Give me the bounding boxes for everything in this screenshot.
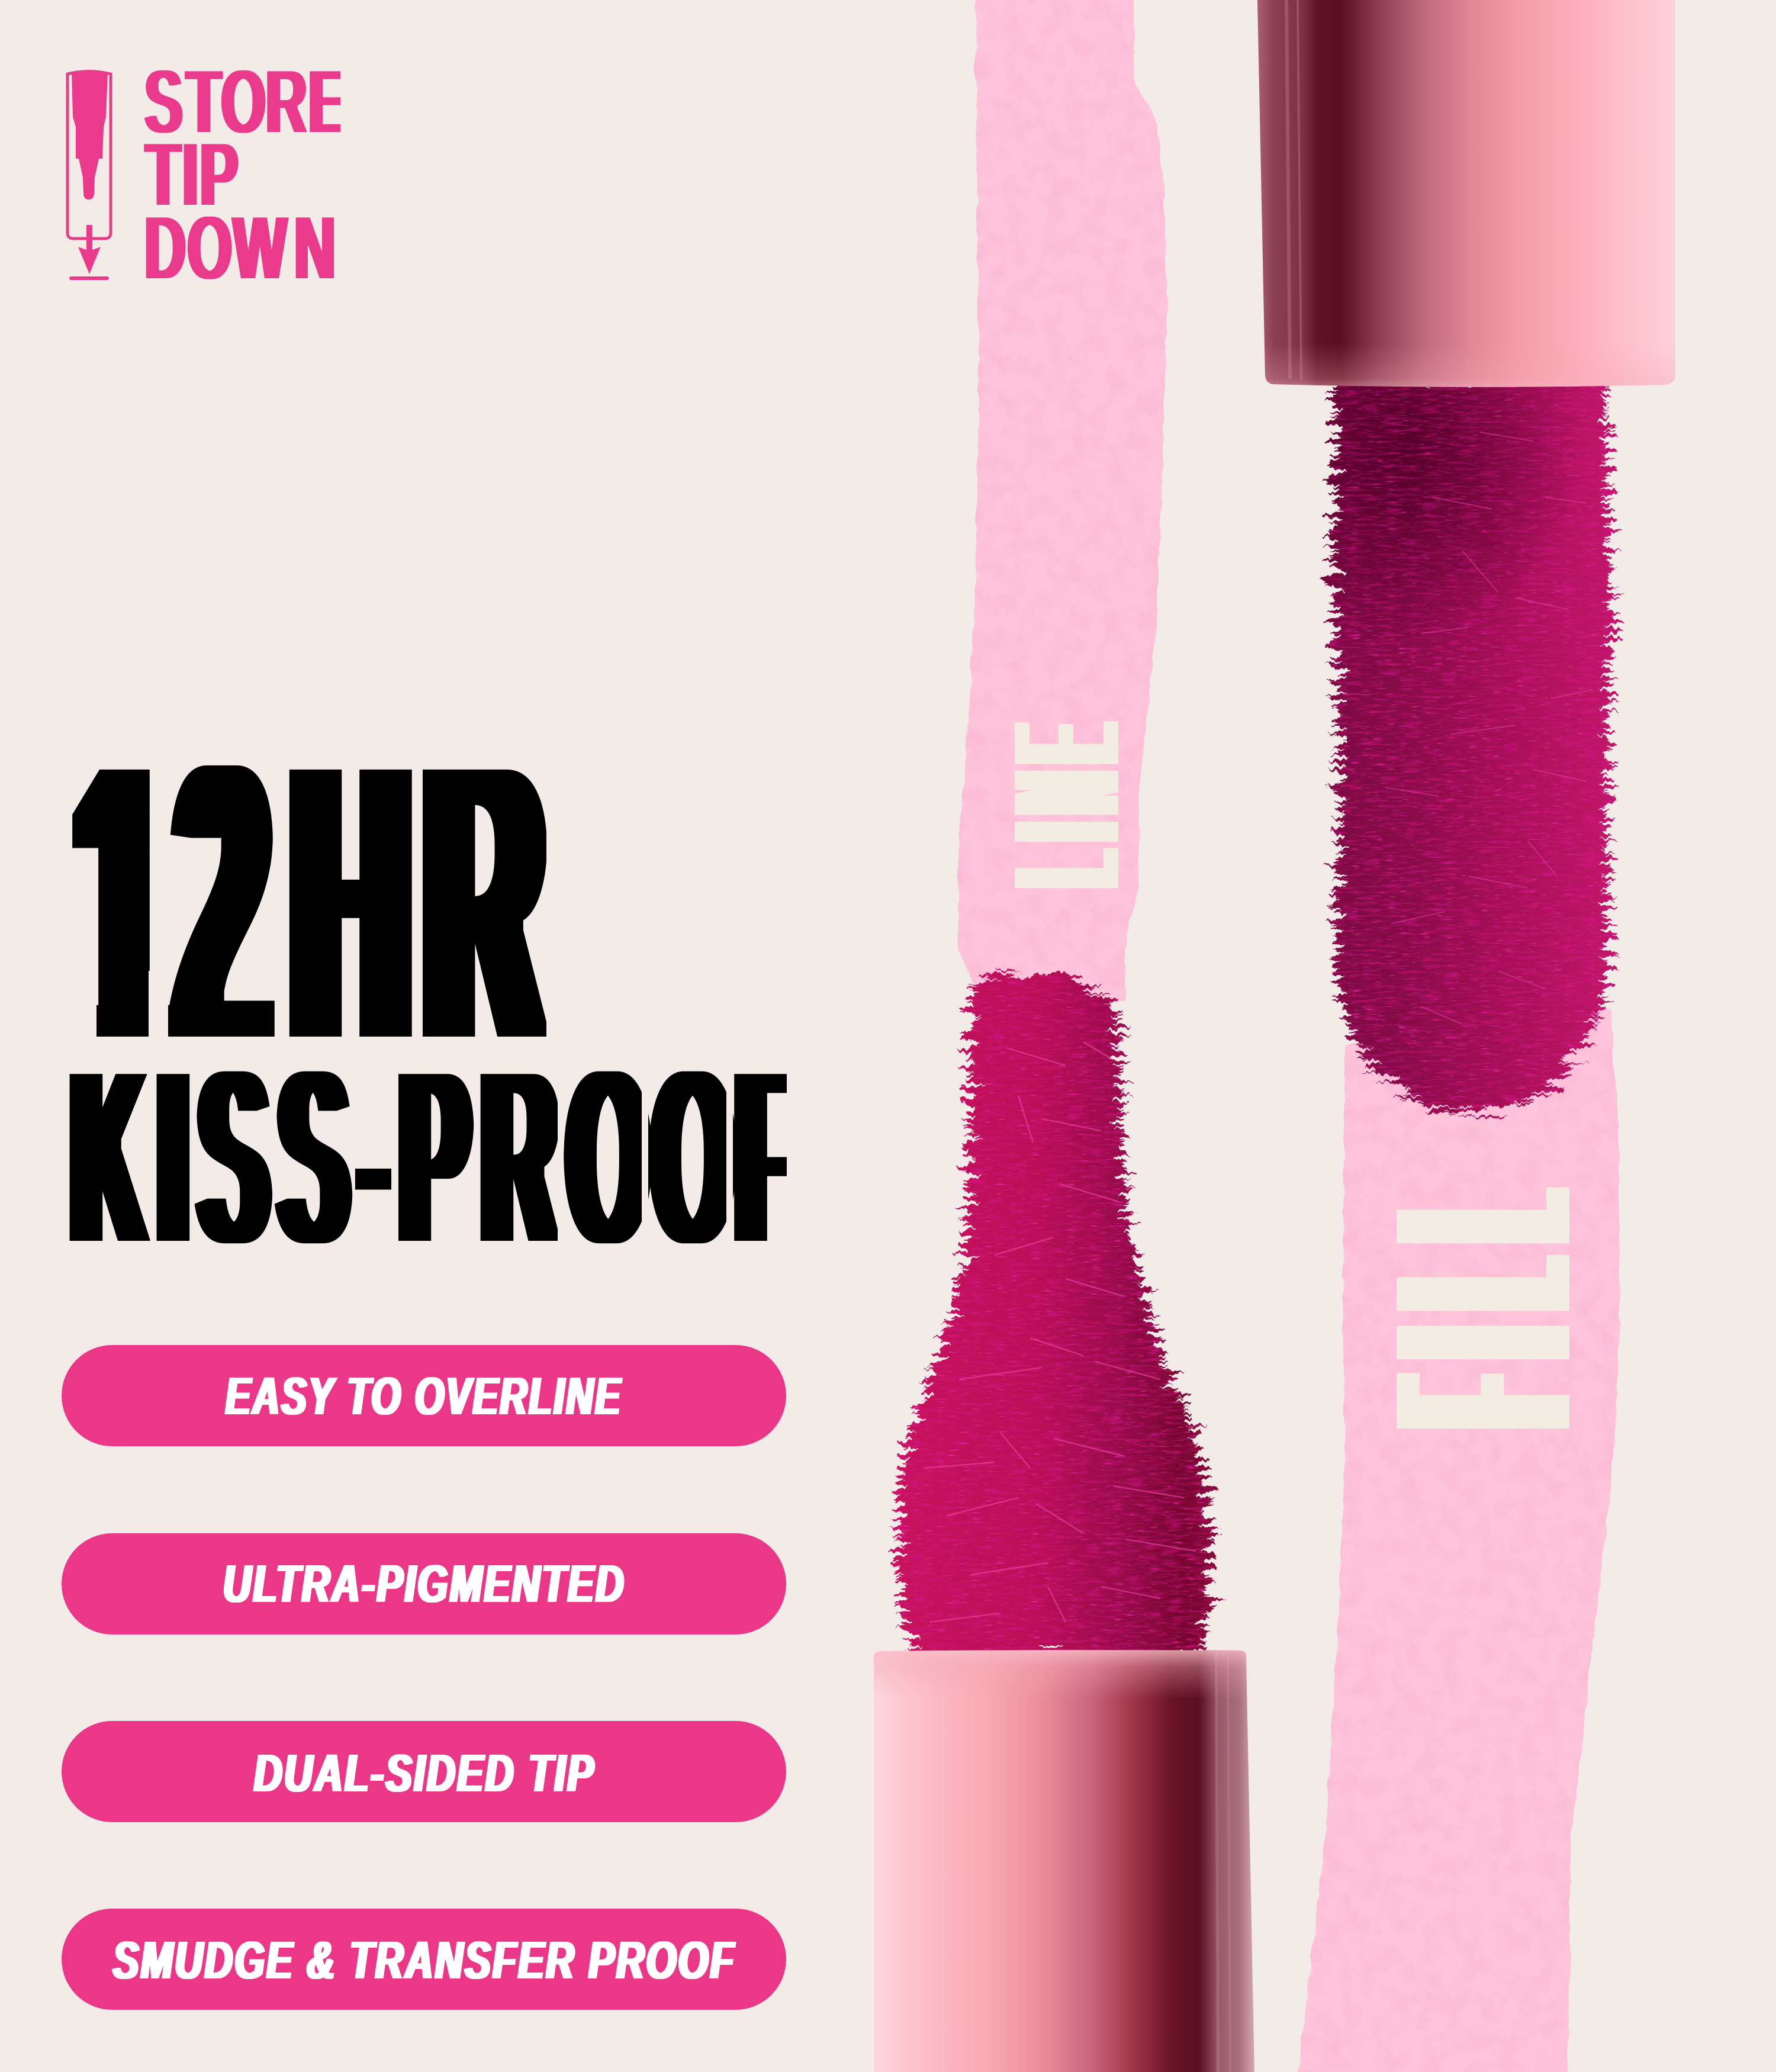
label: fill: FILL [1337,1198,1628,1420]
icon: store tip down applicator with arrow [67,71,111,280]
pill labels: DUAL-SIDED TIP [254,1744,596,1803]
pill labels: ULTRA-PIGMENTED [223,1555,626,1614]
title: 12HR: 12HR [76,678,541,1127]
pill labels [113,1367,736,1990]
pill: smudge and transfer proof [62,1909,786,2010]
swatch: fill stroke [1296,1009,1620,2072]
pill: ultra-pigmented [62,1533,786,1635]
pill: dual-sided tip [62,1721,786,1822]
applicator: fill tip [1333,379,1611,1112]
swatch: line stroke [958,0,1167,1000]
pill: easy to overline [62,1345,786,1446]
heading: store tip down: DOWN [144,197,336,300]
cap: top tube [1257,0,1675,387]
cap: bottom tube [874,1650,1254,2072]
heading: store tip down: TIP [146,124,238,226]
feature pills [62,1345,786,2010]
title: kiss-proof: KISS-PROOF [72,1014,799,1300]
heading: store tip down [144,70,340,279]
label: line: LINE [981,725,1153,886]
heading: store tip down: STORE [144,51,346,153]
applicator: line tip [898,971,1210,1658]
pill labels: SMUDGE & TRANSFER PROOF [113,1931,736,1990]
pill labels: EASY TO OVERLINE [226,1367,622,1426]
